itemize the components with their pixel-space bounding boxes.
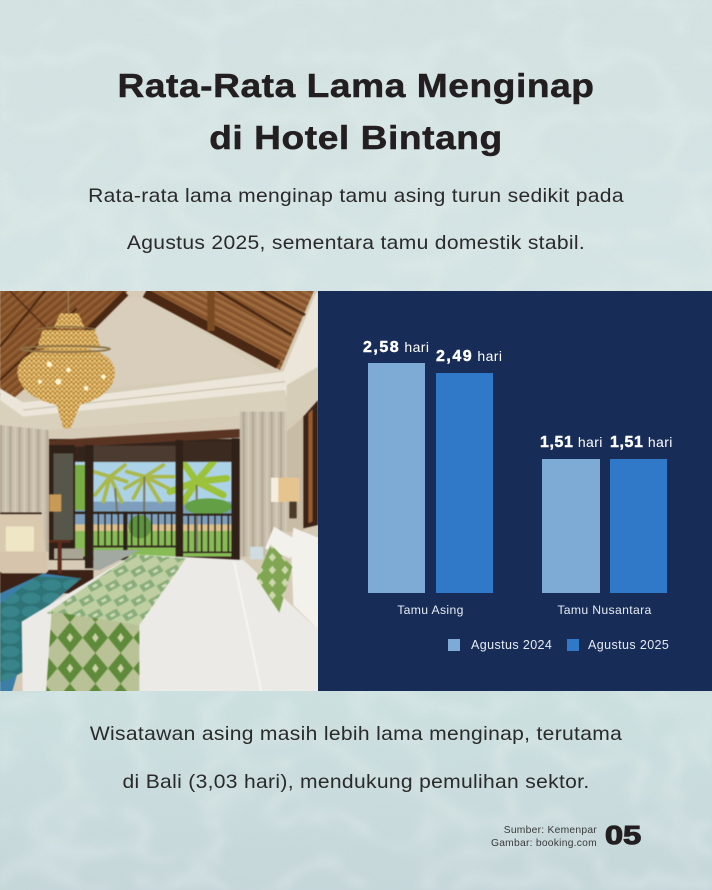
chart panel: [318, 291, 712, 691]
closing text: Wisatawan asing masih lebih lama menginap, terutama: [90, 723, 622, 745]
legend label 2025: Agustus 2025: [588, 638, 669, 652]
frieze wall: [0, 390, 287, 432]
legend swatch 2025: [566, 639, 578, 651]
louvres: [53, 453, 73, 540]
page number: 05: [605, 820, 641, 850]
left curtain: [0, 425, 48, 552]
railing: [74, 512, 232, 553]
title: [117, 67, 595, 156]
roof over veranda: [93, 446, 176, 462]
veranda view: [75, 462, 232, 558]
floor: [0, 570, 93, 593]
title: Rata-Rata Lama Menginap: [117, 67, 595, 104]
intro text: Rata-rata lama menginap tamu asing turun sedikit pada: [88, 185, 624, 207]
white pillows: [265, 527, 320, 632]
source credit: [491, 824, 597, 848]
tufted bench: [0, 577, 82, 682]
source credit: Gambar: booking.com: [491, 838, 597, 848]
intro text: [88, 185, 624, 254]
thatched ceiling left: [0, 288, 130, 402]
door mullions: [49, 438, 240, 568]
sky: [75, 462, 232, 503]
title: di Hotel Bintang: [209, 119, 503, 156]
source credit: Sumber: Kemenpar: [504, 824, 597, 836]
bar: Tamu Nusantara Agustus 2025: [610, 459, 667, 593]
bed linen: [22, 554, 320, 693]
side table: [49, 540, 71, 573]
white cornice: [0, 291, 318, 417]
bar: Tamu Asing Agustus 2024: [368, 363, 425, 593]
palms: [93, 465, 173, 502]
category label: Tamu Asing: Tamu Asing: [397, 603, 464, 617]
hotel room photo illustration: [0, 291, 318, 691]
value label: 2,58 hari: 2,58 hari: [363, 338, 429, 356]
intro text: Agustus 2025, sementara tamu domestik stabil.: [127, 232, 585, 254]
hanging beam: [207, 288, 215, 331]
bar: Tamu Asing Agustus 2025: [436, 373, 493, 593]
plaster vaulted ceiling: [95, 298, 267, 389]
chandelier: [17, 288, 115, 428]
bedside items: [250, 547, 263, 559]
value label: 1,51 hari Nusantara 2024: 1,51 hari: [540, 434, 603, 451]
wall lamp: [271, 478, 299, 502]
sea: [75, 502, 232, 526]
sand: [75, 524, 232, 532]
veranda floor: [54, 548, 83, 559]
bed runner lower: [46, 612, 139, 693]
right curtain: [240, 412, 287, 557]
legend: [448, 638, 669, 652]
blue rug: [0, 573, 82, 693]
armchair: [0, 513, 48, 573]
wall base: [0, 291, 318, 691]
category label: Tamu Nusantara: Tamu Nusantara: [557, 603, 652, 617]
thatched ceiling right: [143, 288, 315, 370]
moulding lines: [23, 382, 285, 410]
legend label 2024: Agustus 2024: [471, 638, 552, 652]
right wall art panel: [287, 417, 303, 532]
green cushion: [257, 544, 292, 613]
big palm: [170, 462, 227, 502]
value label: 1,51 hari Nusantara 2025: 1,51 hari: [610, 434, 673, 451]
closing text: di Bali (3,03 hari), mendukung pemulihan sektor.: [122, 770, 590, 792]
closing text: [90, 723, 622, 792]
bar: Tamu Nusantara Agustus 2024: [542, 459, 600, 593]
right wall: [287, 367, 318, 425]
door frame: [49, 439, 240, 560]
garden: [75, 531, 232, 558]
small side lamp: [49, 494, 61, 512]
bed runner upper: [47, 554, 186, 625]
ceiling beams: [0, 288, 305, 401]
legend swatch 2024: [448, 639, 460, 651]
value label: 2,49 hari: 2,49 hari: [436, 348, 502, 364]
